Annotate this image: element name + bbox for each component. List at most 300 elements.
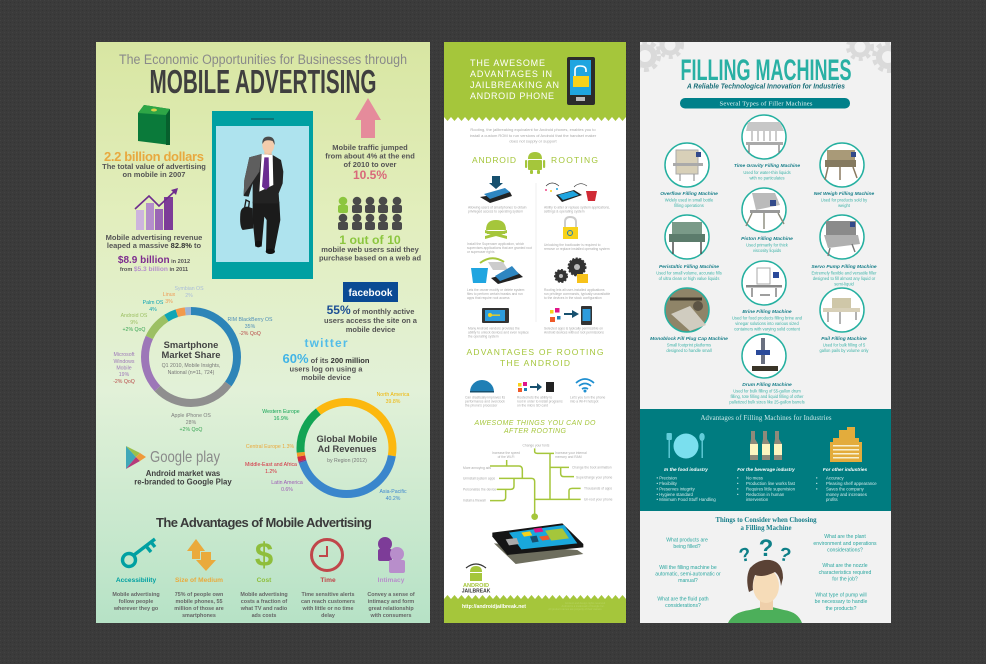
icon: money stack	[138, 105, 170, 145]
intro text	[470, 127, 597, 144]
advantage: wifi hotspot	[570, 379, 605, 404]
questions left: considerations?	[665, 603, 701, 609]
machine: servo pump	[811, 215, 877, 286]
machine: piston	[741, 188, 793, 253]
donut labels: market share: Microsoft	[113, 352, 135, 358]
feature: bucket and phone: apps that require root access	[467, 296, 510, 300]
donut labels: regions: 39.8%	[386, 399, 401, 405]
donut labels: market share: Mobile	[116, 366, 132, 372]
machine: peristaltic: Peristaltic Filling Machine	[659, 264, 719, 270]
heading: advantages of mobile advertising: The Advantages of Mobile Advertising	[156, 515, 372, 530]
donut labels: regions: Central Europe 1.3%	[246, 444, 294, 450]
icon: question marks: ?	[737, 544, 753, 567]
phone with businessman	[212, 111, 313, 279]
subtitle: A Reliable Technological Innovation for Industries	[686, 84, 845, 90]
title: awesome advantages: THE AWESOME	[470, 58, 545, 68]
icon: phone with open lock	[567, 57, 595, 105]
donut labels: market share: 4%	[149, 307, 157, 313]
machine: pail: gallon pails by volume only	[820, 348, 869, 353]
feature: bucket and phone	[467, 258, 525, 300]
icon: bottles	[750, 431, 782, 460]
machine: drum: Drum Filling Machine	[742, 382, 792, 388]
stat: facebook 55%	[324, 303, 418, 334]
list: beverage industry: For the beverage industry	[737, 467, 795, 472]
machine: drum: Used for bulk filling of 55-gallon drum	[733, 388, 801, 394]
tree diagram: Supercharge your phone	[576, 476, 612, 480]
footer band: All product names are property of their owners	[548, 607, 602, 611]
band: advantages for industries	[640, 409, 891, 511]
feature: alter apps	[544, 183, 610, 214]
donut labels: regions: Western Europe	[262, 409, 300, 415]
donut labels: regions: Middle-East and Africa	[245, 462, 297, 468]
stat: twitter 60%: users log on using a	[290, 364, 363, 374]
intro text: install a custom ROM to run versions of Android that the handset maker	[470, 133, 597, 138]
heading: android rooting: ANDROID	[472, 155, 516, 165]
donut chart: global mobile ad revenues: by Region (2012)	[327, 458, 367, 464]
machine: net weigh: weight	[838, 203, 851, 208]
questions left: Will the filling machine be	[659, 565, 717, 571]
donut chart: smartphone market share	[145, 311, 237, 403]
stat: 1 out of 10: mobile web users said they	[321, 245, 420, 254]
logo: android jailbreak	[462, 564, 491, 594]
questions left: automatic, semi-automatic or	[655, 572, 721, 578]
list: other industries: For other industries	[823, 467, 868, 472]
column: size of medium: million of those are	[174, 606, 224, 612]
heading: awesome things	[474, 420, 596, 435]
feature: bucket and phone: Lets the owner modify or delete system	[467, 288, 525, 292]
machine: piston: Piston Filling Machine	[741, 236, 793, 242]
intro text: Rooting, the jailbreaking equivalent for Android phones, enables you to	[470, 127, 596, 132]
icon: pink up arrow	[355, 98, 381, 138]
icon: factory	[830, 427, 862, 462]
machine: brine: vinegar solutions into various sized	[735, 321, 799, 326]
illustration: tablet	[492, 523, 583, 564]
title: awesome advantages: ADVANTAGES IN	[470, 69, 552, 79]
machine: pail: Used for bulk filling of 5	[823, 342, 866, 348]
machine: peristaltic: of ultra clean or high value liquids	[659, 276, 719, 281]
list: other industries: profits	[826, 497, 838, 502]
icon: question marks: ?	[759, 535, 773, 562]
donut labels: market share: -2% QoQ	[239, 331, 261, 337]
advantage: performance: performance and overclock	[465, 400, 505, 404]
logo: facebook	[343, 282, 398, 302]
list: beverage industry: No mess	[746, 476, 763, 480]
column: size of medium	[174, 577, 224, 619]
donut labels: market share: Linux	[163, 292, 176, 298]
column: cost: costs a fraction of	[241, 599, 287, 605]
heading: android rooting: ROOTING	[551, 155, 598, 165]
list: other industries: Accuracy	[826, 476, 845, 480]
stat: facebook 55%: mobile device	[346, 325, 395, 334]
tree diagram: Uninstall system apps	[463, 476, 495, 480]
donut labels: market share: Apple iPhone OS	[171, 413, 211, 419]
machine: net weigh: Used for products sold by	[821, 198, 868, 202]
tree diagram: More annoying ads	[463, 466, 491, 470]
title: awesome advantages: JAILBREAKING AN	[470, 80, 559, 90]
donut labels: market share: 3%	[165, 299, 173, 305]
feature: unlock key phone	[468, 308, 529, 338]
questions right: for the job?	[832, 576, 858, 582]
questions right: the products?	[826, 606, 857, 612]
machine: overflow: filling operations	[674, 203, 704, 208]
column: time: Time sensitive alerts	[302, 592, 354, 598]
feature: unlock key phone: the operating system	[468, 334, 499, 338]
heading: android rooting	[472, 152, 598, 174]
donut chart: global mobile ad revenues	[300, 402, 392, 494]
column: size of medium: mobile phones, 55	[175, 599, 223, 605]
column: intimacy: intimacy and form	[368, 599, 414, 605]
list: other industries: •	[816, 481, 818, 486]
list: food industry: • Hygiene standard	[656, 492, 693, 497]
machine: drum: filling, tote filling and liquid filling of other	[730, 394, 804, 399]
donut chart: global mobile ad revenues: Global Mobile	[317, 434, 377, 444]
heading pill: several types	[680, 98, 850, 108]
tree diagram: Install a firewall	[463, 498, 486, 502]
column: cost: Mobile advertising	[240, 592, 288, 598]
column: intimacy: great relationship	[368, 606, 414, 612]
list: beverage industry	[737, 467, 796, 502]
column: cost: Cost	[257, 577, 272, 584]
text: android market: re-branded to Google Play	[134, 478, 232, 486]
feature: unlock key phone: ability to unlock devices and even replace	[468, 330, 529, 334]
column: cost: what TV and radio	[240, 606, 288, 612]
list: beverage industry: Reduction in human	[746, 492, 785, 497]
feature: superuser: Install the Superuser application, which	[467, 242, 524, 246]
tree diagram: Change the boot animation	[572, 466, 612, 470]
stat: 1 out of 10	[319, 233, 421, 262]
advantage: install programs: Rooted lets the ability to	[517, 396, 552, 400]
header band	[444, 42, 626, 121]
column: intimacy: with consumers	[369, 613, 412, 619]
stat: facebook 55%: 55% of monthly active	[327, 303, 414, 317]
heading: awesome things: AWESOME THINGS YOU CAN DO	[474, 420, 596, 427]
machine: net weigh: Net Weigh Filling Machine	[814, 191, 875, 197]
feature: apps to phone: Android devices without root permissions	[544, 330, 604, 334]
footer band: Content and design rights reserved	[565, 601, 606, 605]
icon: two people	[378, 537, 405, 573]
heading: things to consider: Things to Consider when Choosing	[716, 517, 817, 524]
feature: apps to phone	[544, 306, 604, 334]
donut chart: smartphone market share: National (n=11, 724)	[168, 370, 215, 376]
stat: twitter 60%: 60% of its 200 million	[283, 351, 370, 366]
column: size of medium: 75% of people own	[175, 592, 223, 598]
donut labels: market share: Android OS	[121, 313, 148, 319]
title: mobile advertising: MOBILE ADVERTISING	[150, 63, 376, 100]
machine: overflow	[660, 143, 718, 208]
tree diagram: Increase the speed	[492, 451, 520, 455]
stat: twitter 60%	[283, 351, 370, 382]
stat: revenue growth	[106, 233, 202, 273]
column: intimacy	[367, 577, 415, 619]
donut labels: market share: +2% QoQ	[180, 427, 202, 433]
donut labels: market share: +2% QoQ	[123, 327, 145, 333]
stat: twitter 60%: mobile device	[301, 373, 351, 382]
feature: alter apps: settings & operating system	[544, 210, 585, 214]
tree diagram: of the Wi-Fi	[498, 455, 515, 459]
machine: net weigh	[814, 143, 875, 208]
machine: time gravity	[734, 115, 800, 180]
machine: servo pump: designed to fill almost any liquid or	[813, 276, 876, 281]
stat: mobile traffic: from about 4% at the end	[325, 152, 415, 160]
heading: advantages of rooting: ADVANTAGES OF ROOTING	[466, 347, 604, 357]
feature: alter apps: Ability to alter or replace system applications,	[544, 206, 610, 210]
divider line	[535, 183, 537, 322]
machine: brine: containers with varying solid content	[734, 326, 801, 332]
stat: mobile traffic	[325, 143, 415, 182]
stat: revenue growth: leaped a massive 82.8% to	[107, 241, 202, 250]
stat: revenue growth: $8.9 billion in 2012	[118, 255, 190, 266]
illustration: person thinking	[728, 535, 802, 623]
list: beverage industry: Production line works fast	[746, 481, 796, 486]
column: accessibility: wherever they go	[113, 606, 159, 612]
machine: servo pump: Servo Pump Filling Machine	[811, 264, 877, 270]
heading pill: several types: Several Types of Filler Machines	[720, 101, 813, 108]
advantage: install programs: root in order to install programs	[517, 400, 563, 404]
list: other industries	[816, 467, 877, 502]
stat: revenue growth: Mobile advertising revenue	[106, 233, 202, 242]
list: other industries: Pleasing shelf appearance	[826, 481, 877, 486]
donut labels: market share: 35%	[245, 324, 256, 330]
list: beverage industry: Requires little supervision	[746, 486, 796, 492]
list: food industry: • Flexibility	[656, 481, 678, 486]
column: time: Time	[320, 577, 336, 584]
footer band: Android is a trademark of Google Inc.	[562, 604, 605, 608]
feature: unlock key phone: Many Android vendors provides the	[468, 326, 520, 330]
icon: size arrows	[187, 539, 216, 571]
logo: android jailbreak: JAILBREAK	[462, 588, 491, 594]
machine: time gravity: Time Gravity Filling Machine	[734, 163, 800, 169]
stat: 2.2 billion dollars: 2.2 billion dollars	[104, 149, 204, 164]
tree diagram: Personalize the device	[463, 488, 496, 492]
questions right: What are the plant	[824, 534, 866, 540]
stat: 1 out of 10: purchase based on a web ad	[319, 254, 421, 262]
logo: google play: Google play	[150, 449, 220, 466]
heading: advantages of rooting	[466, 347, 604, 368]
machine: drum: palletized bulk sizes like 25-gallon barrels	[729, 400, 805, 404]
panel: mobile advertising	[96, 42, 430, 623]
stat: revenue growth: from $5.3 billion in 2011	[120, 266, 188, 273]
feature: unlock bootloader	[544, 217, 610, 251]
stat: 2.2 billion dollars: The total value of advertising	[102, 162, 206, 171]
questions right	[813, 534, 877, 612]
panel: android jailbreak	[444, 42, 626, 623]
feature: gears and lock: to the devices in the stock configuration	[544, 296, 602, 300]
list: beverage industry: •	[737, 481, 739, 486]
icon: plate and cutlery	[666, 433, 705, 458]
machine: time gravity: with no particulates	[749, 176, 785, 180]
title: awesome advantages: ANDROID PHONE	[470, 91, 554, 101]
tree diagram	[463, 444, 613, 520]
donut labels: market share: 28%	[186, 420, 197, 426]
footer band	[444, 595, 626, 623]
machine: time gravity: Used for water-thin liquids	[743, 170, 791, 175]
donut labels: market share: Windows	[113, 359, 135, 365]
questions left: manual?	[678, 578, 698, 584]
title: awesome advantages	[470, 58, 559, 101]
machine: monoblock	[650, 288, 728, 353]
footer band: http://androidjailbreak.net	[462, 604, 526, 610]
advantage: performance: Can drastically improves its	[465, 396, 505, 400]
machine: servo pump: Extremely flexible and versatile filler	[811, 270, 877, 276]
list: other industries: •	[816, 476, 818, 480]
machine: drum	[729, 334, 805, 404]
machine: monoblock: Monoblock Fill Plug Cap Machine	[650, 336, 728, 342]
icon: dollar: $	[255, 536, 273, 573]
stat: mobile traffic: 10.5%	[353, 168, 387, 182]
stat: mobile traffic: Mobile traffic jumped	[332, 143, 408, 152]
stat: 2.2 billion dollars	[102, 149, 206, 179]
list: beverage industry: •	[737, 476, 739, 480]
tree diagram: memory and RAM	[555, 455, 582, 459]
questions right: be necessary to handle	[815, 599, 868, 605]
advantage: install programs: on the micro SD card	[517, 404, 548, 408]
donut chart: smartphone market share: Q1 2010, Mobile Insights,	[162, 363, 220, 369]
list: beverage industry: intervention	[746, 497, 769, 502]
tree diagram: Un-root your phone	[584, 498, 613, 502]
tree diagram: Thousands of apps	[584, 486, 612, 490]
donut chart: global mobile ad revenues: Ad Revenues	[318, 444, 376, 454]
icon: corner gears	[640, 42, 891, 73]
machine: peristaltic: Used for small volume, accurate fills	[656, 270, 722, 276]
list: other industries: money and increases	[826, 492, 867, 497]
donut labels: regions	[245, 392, 410, 502]
donut labels: regions: North America	[377, 392, 410, 398]
icon: clock	[312, 540, 342, 570]
column: cost: ads costs	[252, 613, 276, 619]
column: accessibility: Mobile advertising	[112, 592, 160, 598]
tree diagram: Increase your internal	[555, 451, 587, 455]
list: food industry: In the food industry	[664, 467, 708, 472]
text: android market: Android market was	[146, 469, 221, 478]
advantage: wifi hotspot: into a Wi-Fi hotspot	[570, 400, 598, 404]
questions left: What products are	[666, 538, 708, 544]
stat: mobile traffic: of 2010 to over	[344, 160, 397, 169]
machine: piston: Used primarily for thick	[746, 242, 789, 248]
machine: pail	[820, 288, 869, 353]
donut labels: market share	[113, 286, 273, 433]
questions right: characteristics required	[819, 570, 871, 576]
machine: brine: Brine Filling Machine	[742, 309, 792, 315]
donut labels: regions: Asia-Pacific	[379, 489, 407, 495]
logo: android jailbreak: ANDROID	[463, 583, 489, 589]
advantage: wifi hotspot: Let's you turn the phone	[570, 396, 605, 400]
feature: obtain access	[468, 176, 527, 214]
donut labels: market share: RIM BlackBerry OS	[228, 317, 273, 323]
icon: key	[122, 539, 155, 566]
list: other industries: Saves the company	[826, 486, 865, 492]
donut labels: regions: 16.9%	[274, 416, 289, 422]
questions right: considerations?	[827, 548, 863, 554]
heading: awesome things: AFTER ROOTING	[503, 428, 567, 435]
machine: peristaltic	[656, 215, 722, 281]
column: time	[301, 577, 355, 619]
title: economic opportunities: The Economic Opportunities for Businesses through	[119, 52, 407, 67]
machine: monoblock: Small footprint platforms	[667, 342, 711, 348]
feature: superuser	[467, 220, 532, 254]
donut labels: regions: 0.6%	[281, 487, 293, 493]
questions right: environment and operations	[813, 541, 877, 547]
advantage: performance	[465, 380, 505, 408]
machine: brine: Used for food products filling brine and	[732, 316, 803, 320]
donut labels: market share: -2% QoQ	[113, 379, 135, 385]
list: beverage industry: •	[737, 492, 739, 497]
stat: 1 out of 10: 1 out of 10	[339, 233, 401, 247]
list: food industry: • Minimum Food Stuff Handling	[656, 497, 716, 502]
questions right: What are the nozzle	[822, 563, 868, 569]
list: food industry: • Preserves integrity	[656, 486, 696, 492]
feature: superuser: or superuser rights	[467, 250, 495, 254]
icon: question marks	[737, 535, 793, 567]
list: other industries: •	[816, 486, 818, 492]
icon: android robot	[525, 152, 545, 174]
donut labels: market share: Palm OS	[143, 300, 164, 306]
column: cost	[240, 577, 288, 619]
feature: gears and lock	[544, 258, 610, 300]
feature: superuser: supervises applications that are granted root	[467, 246, 532, 250]
machine: servo pump: semi-liquid	[834, 282, 854, 286]
machine: pail: Pail Filling Machine	[821, 336, 867, 342]
column: accessibility: follow people	[119, 599, 153, 605]
machine: brine	[732, 261, 803, 332]
list: food industry: • Precision	[656, 476, 677, 480]
logo: facebook: facebook	[349, 288, 393, 299]
feature: obtain access: Allowing users of smartphones to obtain	[468, 206, 527, 210]
questions left: What are the fluid path	[657, 596, 709, 602]
advantage: performance: the phone's processor	[465, 404, 498, 408]
column: size of medium: Size of Medium	[175, 577, 223, 584]
logo: google play	[126, 446, 220, 469]
donut labels: market share: Symbian OS	[174, 286, 204, 292]
machine: overflow: Overflow Filling Machine	[660, 191, 718, 197]
column: size of medium: smartphones	[182, 613, 216, 619]
icon: rising revenue chart	[135, 188, 178, 230]
column: intimacy: Intimacy	[378, 577, 405, 584]
machine: piston: viscosity liquids	[753, 248, 781, 253]
column: accessibility	[112, 577, 160, 612]
feature: gears and lock: run privilege commands, typically unavailable	[544, 292, 610, 296]
tree diagram: Change your fonts	[523, 444, 550, 448]
intro text: does not supply or support	[509, 138, 557, 144]
donut labels: market share: 2%	[185, 293, 193, 299]
stat: facebook 55%: users access the site on a	[324, 316, 418, 325]
questions right: What type of pump will	[815, 592, 867, 598]
questions left: being filled?	[673, 544, 701, 550]
donut labels: regions: Latin America	[271, 480, 303, 486]
feature: unlock bootloader: remove or replace installed operating system	[544, 247, 610, 251]
text: android market	[134, 469, 232, 486]
feature: obtain access: privileged access to operating system	[468, 210, 523, 214]
questions left	[655, 538, 721, 609]
panel: filling machines	[631, 33, 902, 623]
column: time: delay	[321, 613, 335, 619]
title: filling machines: FILLING MACHINES	[680, 54, 852, 87]
feature: gears and lock: Rooting lets all user-installed applications	[544, 288, 605, 292]
heading: advantages of filling machines: Advantages of Filling Machines for Industries	[700, 415, 832, 422]
heading: things to consider	[716, 517, 817, 532]
logo: twitter: twitter	[304, 336, 348, 350]
column: accessibility: Accessibility	[116, 577, 156, 584]
list: beverage industry: •	[737, 486, 739, 492]
icon: question marks: ?	[777, 544, 793, 567]
column: time: with little or no time	[302, 606, 353, 612]
donut labels: regions: 1.2%	[265, 469, 277, 475]
donut chart: smartphone market share: Market Share	[162, 349, 220, 360]
advantage: install programs	[517, 382, 563, 408]
feature: apps to phone: Selected apps is typically permissible on	[544, 326, 603, 330]
donut labels: regions: 40.2%	[386, 496, 401, 502]
feature: unlock bootloader: Unlocking the bootloader is required to	[544, 243, 601, 247]
feature: bucket and phone: files to perform certain tweaks and run	[467, 292, 523, 296]
